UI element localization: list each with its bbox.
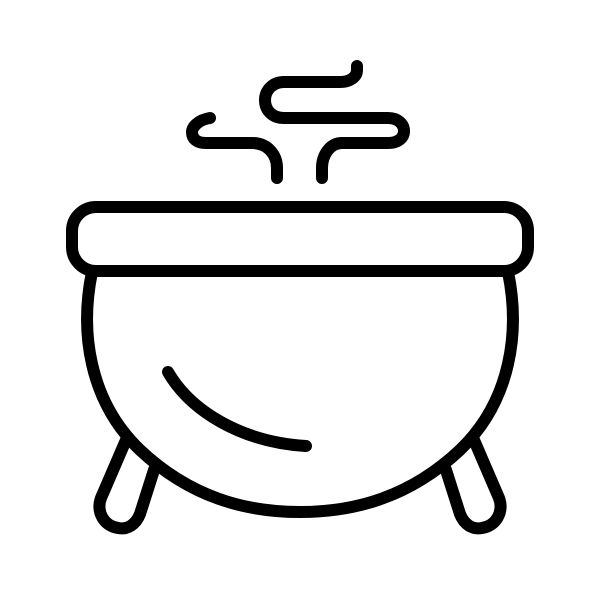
icon: steam left bbox=[192, 118, 277, 178]
icon: pot body bbox=[87, 272, 513, 512]
icon: rim bbox=[72, 207, 528, 271]
icon: legs bbox=[100, 440, 500, 528]
icon: highlight arc bbox=[168, 372, 306, 446]
icon: steam right bbox=[265, 66, 404, 178]
